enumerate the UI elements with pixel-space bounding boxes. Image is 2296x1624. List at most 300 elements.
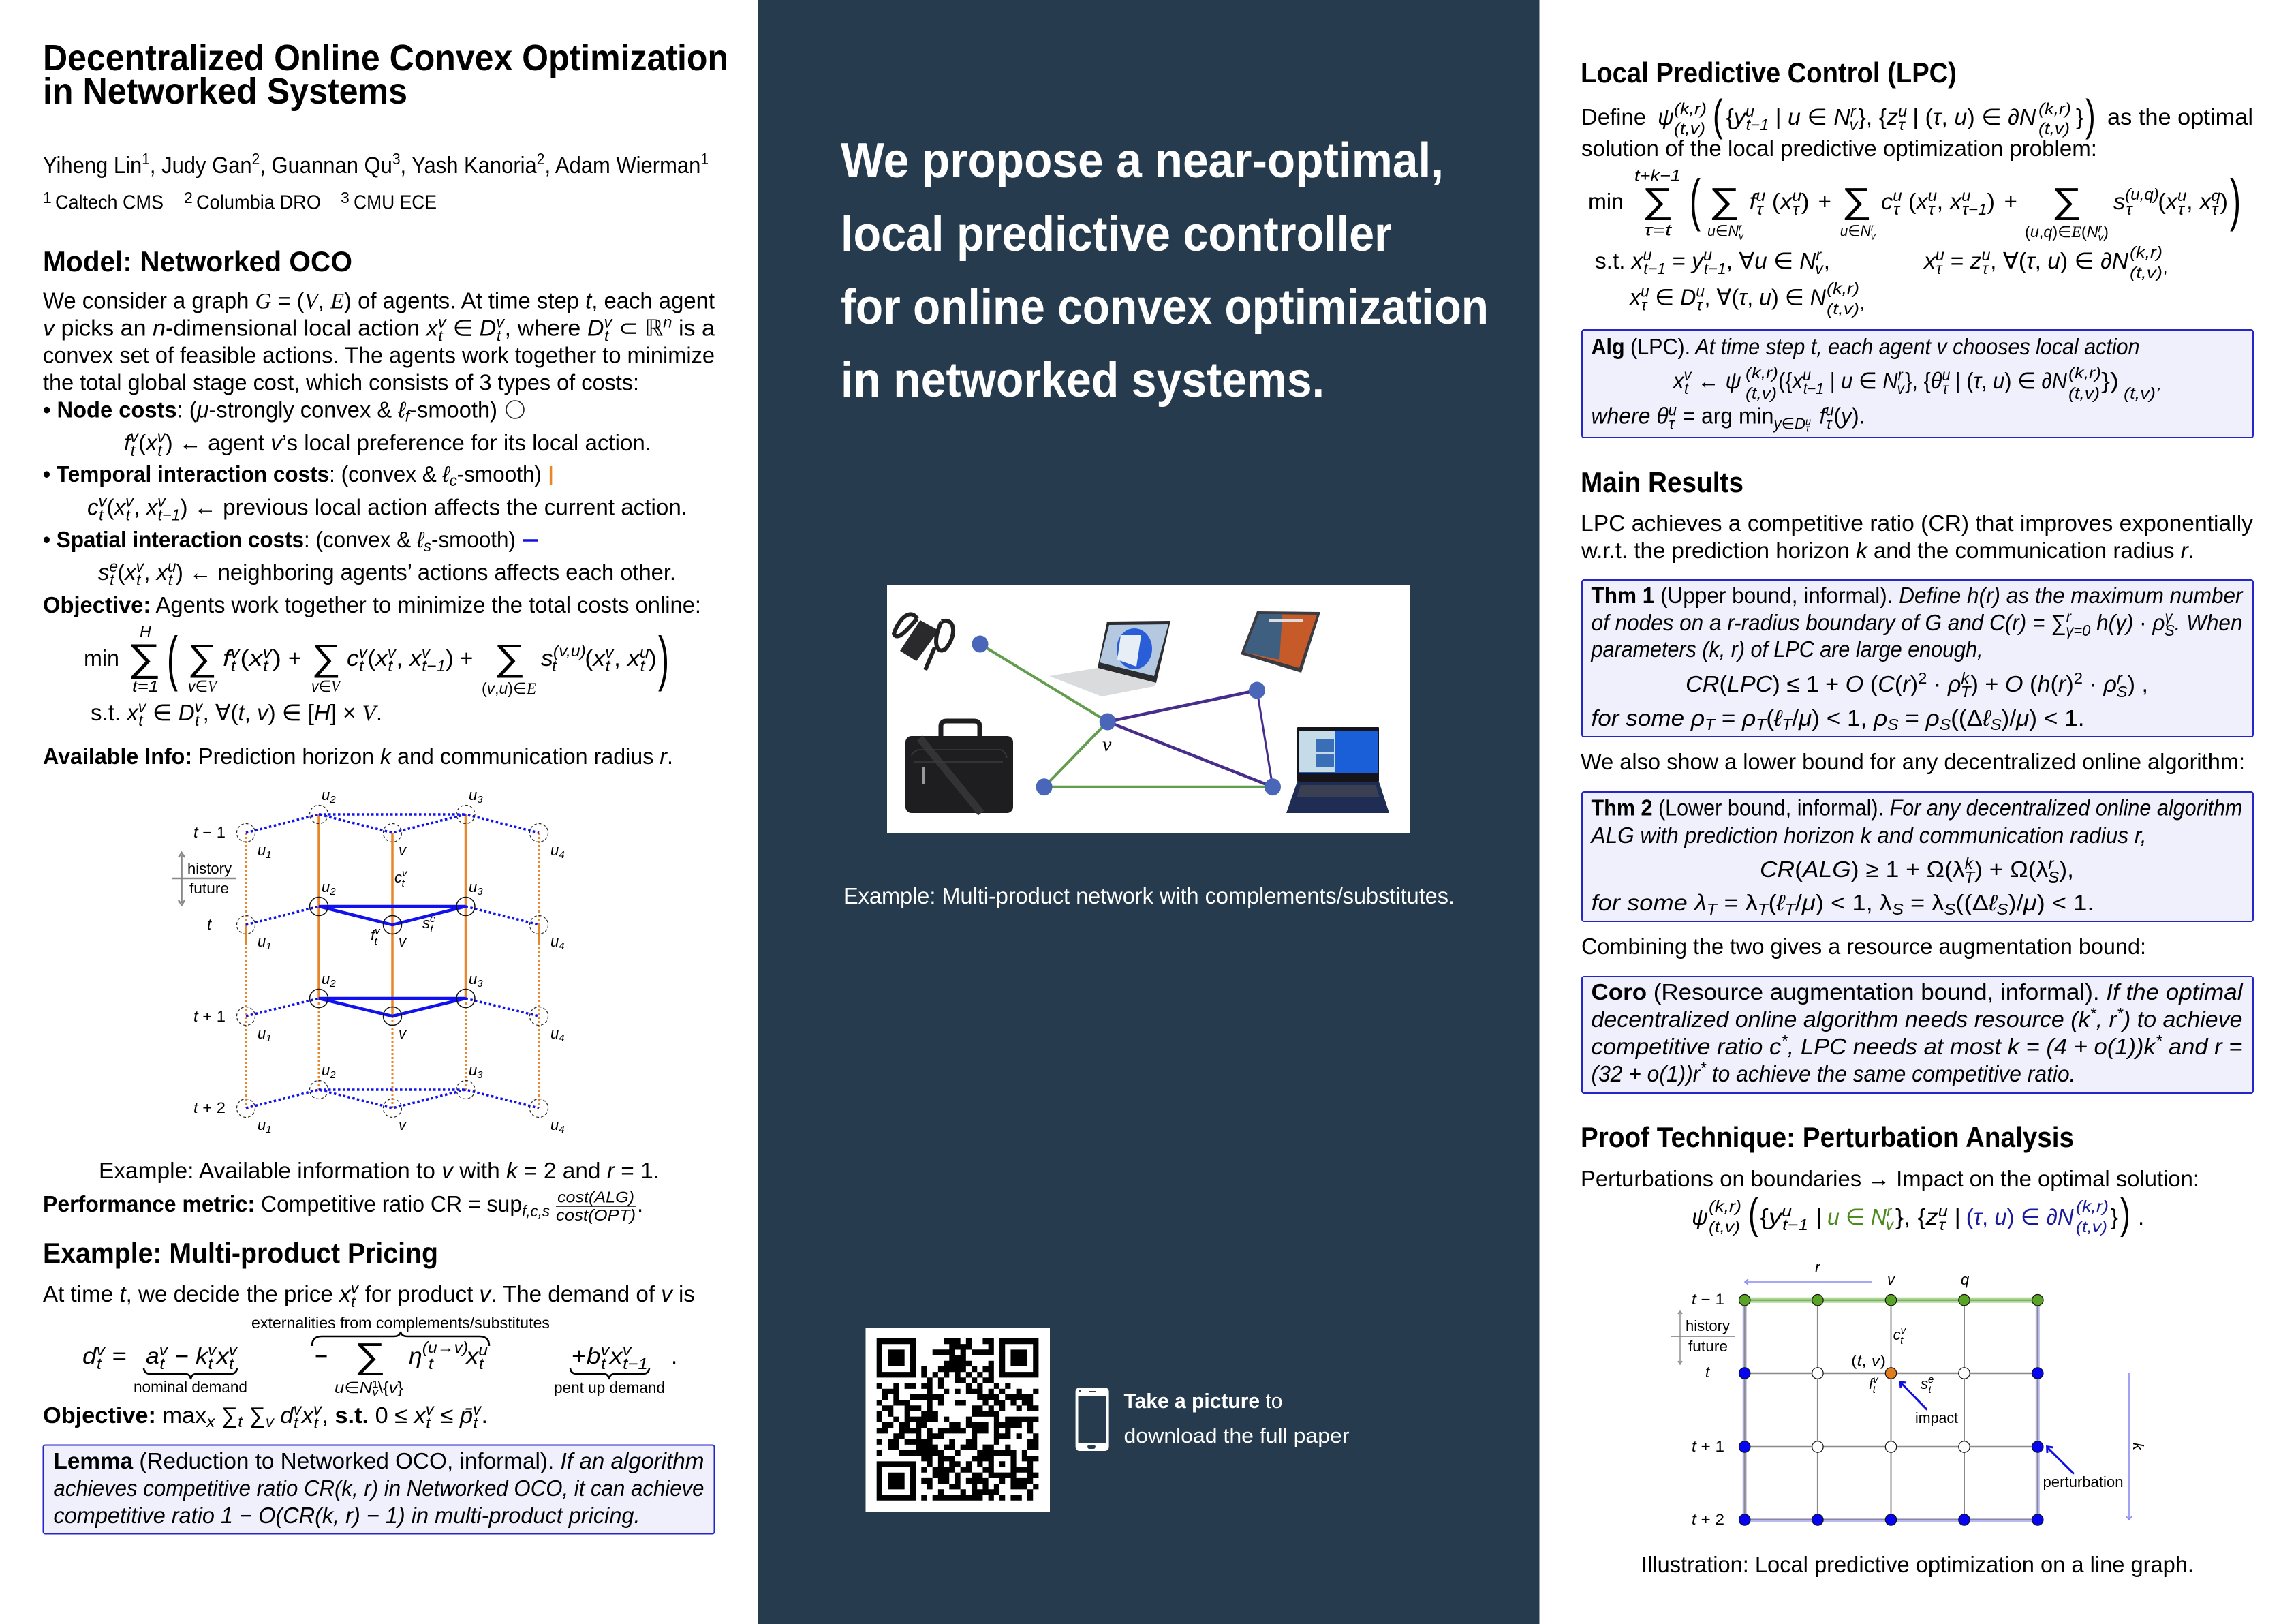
text block: pricing objective: d: [274, 1403, 294, 1428]
text block: model description: D: [480, 315, 496, 341]
callout: theorem 2: T: [1784, 900, 1797, 918]
callout: algorithm LPC: [1582, 330, 2253, 438]
callout: lemma: [44, 1445, 714, 1533]
equation: global objective: x: [408, 645, 422, 671]
text block: available info: Available Info: Prediction horizon k and communication radius r.: [43, 744, 673, 769]
bullet: node costs: • Node costs: (μ-strongly convex & ℓ: [43, 397, 405, 423]
bullet: spatial costs: x: [155, 560, 168, 585]
equation: constraints: (t,v): [2130, 264, 2162, 281]
callout: corollary: *: [1700, 1059, 1707, 1077]
callout: theorem 1: Thm 1 (Upper bound, informal). Define h(r) as the maximum number: [1592, 583, 2244, 608]
equation: local optimization problem: r: [2098, 223, 2103, 234]
QR code: [865, 1328, 1050, 1512]
callout: corollary: and r =: [2162, 1034, 2243, 1059]
equation: constraints: x: [1628, 285, 1642, 309]
equation: demand: v: [208, 1341, 217, 1359]
caption: line graph: Illustration: Local predictive optimization on a line graph.: [1641, 1552, 2194, 1577]
text block: model description: , where: [505, 315, 587, 341]
text block: LPC definition: (k,r): [2038, 99, 2071, 117]
callout: theorem 1: S: [1887, 716, 1899, 733]
callout: theorem 1: =: [1899, 705, 1926, 731]
chart: line graph perturbation: t + 2: [1692, 1511, 1724, 1528]
text block: performance metric: f,c,s: [522, 1202, 550, 1220]
bullet: temporal costs: v: [125, 492, 134, 510]
chart: available information graph: history: [187, 860, 232, 877]
callout: theorem 1: 2: [1918, 669, 1927, 687]
callout: download the paper: Take a picture to: [1124, 1389, 1282, 1413]
bullet: spatial costs: [43, 527, 676, 589]
equation: constraints: =: [1666, 248, 1692, 273]
affiliations: CMU ECE: [354, 192, 437, 214]
text block: model description: v: [604, 313, 613, 331]
text block: LPC definition: Define: [1581, 104, 1646, 129]
callout: algorithm LPC: t−1: [1803, 380, 1824, 397]
text block: performance metric: cost(ALG): [557, 1189, 634, 1206]
text block: pricing objective: .: [481, 1403, 488, 1428]
chart: line graph perturbation: c: [1893, 1326, 1901, 1343]
equation: perturbation: .: [2138, 1204, 2144, 1229]
text block: pricing objective: t: [474, 1414, 479, 1432]
text block: model description: v: [438, 313, 447, 331]
chart: available information graph: 1: [266, 1032, 272, 1044]
equation: local optimization problem: [1588, 167, 2241, 243]
equation: perturbation: }, {z: [1895, 1204, 1937, 1229]
equation: global objective: x: [591, 645, 606, 671]
equation: perturbation: τ: [1939, 1216, 1946, 1234]
bullet: node costs: t: [157, 442, 163, 459]
callout: corollary: ) to achieve: [2120, 1007, 2243, 1032]
title: [43, 37, 728, 112]
equation: local optimization problem: τ: [1756, 200, 1764, 218]
equation: global objective: v∈V: [188, 677, 219, 695]
callout: theorem 1: ((Δ: [1951, 705, 1983, 731]
equation: constraints: (k,r): [1827, 279, 1859, 297]
text block: pricing objective: ∑: [243, 1403, 266, 1428]
text block: model description: n: [663, 313, 672, 331]
text block: model description: t: [438, 327, 444, 345]
equation: constraints: τ: [1982, 260, 1989, 277]
bullet: temporal costs: [43, 461, 687, 523]
chart: line graph perturbation: [1671, 1259, 2147, 1528]
text block: performance metric: Performance metric: Competitive ratio CR = sup: [43, 1191, 531, 1216]
icon: laptop bag: [905, 721, 1013, 813]
equation: local optimization problem: τ: [1793, 200, 1800, 218]
equation: local optimization problem: x: [1914, 189, 1929, 214]
callout: theorem 2: [1582, 792, 2253, 921]
callout: algorithm LPC: (t,v): [1746, 384, 1777, 402]
equation: demand: =: [105, 1343, 127, 1368]
bullet: spatial costs: v: [136, 557, 145, 575]
text block: pricing objective: v: [313, 1400, 323, 1418]
text block: pricing objective: ≤: [434, 1403, 460, 1428]
callout: theorem 1: O (h(r): [2005, 671, 2073, 696]
equation: perturbation: (t,v): [1709, 1218, 1740, 1236]
equation: local optimization problem: u: [1928, 187, 1937, 204]
equation: global objective: v: [422, 643, 431, 661]
equation: demand: (u→v): [422, 1338, 468, 1356]
text block: pricing objective: p̄: [459, 1403, 473, 1428]
equation: demand: t: [229, 1355, 235, 1373]
equation: constraints: u: [1643, 246, 1652, 264]
callout: corollary: *: [1781, 1032, 1788, 1050]
callout: lemma: achieves competitive ratio CR(k, r) in Networked OCO, it can achieve: [53, 1475, 704, 1501]
heading: model: Model: Networked OCO: [43, 245, 352, 277]
chart: available information graph: 3: [477, 794, 483, 806]
callout: theorem 1: · ρ: [2140, 610, 2165, 635]
equation: local optimization problem: (u,q): [2125, 185, 2159, 203]
equation: demand: u∈N: [335, 1379, 371, 1396]
callout: theorem 1: r: [2117, 669, 2123, 687]
equation: demand: v: [623, 1341, 632, 1359]
chart: available information graph: 2: [329, 1069, 336, 1081]
callout: theorem 2: T: [1758, 900, 1770, 918]
equation: global objective: ): [446, 645, 454, 671]
callout: algorithm LPC: (t,v)’: [2124, 384, 2160, 402]
affiliations: Columbia DRO: [196, 192, 321, 214]
text block: pricing objective: ,: [322, 1403, 335, 1428]
equation: global objective: s.t. x: [91, 700, 138, 725]
equation: local optimization problem: τ: [2212, 200, 2219, 218]
authors: , Yash Kanoria: [401, 153, 537, 179]
callout: theorem 1: /: [1792, 705, 1799, 731]
bullet: temporal costs: x: [145, 495, 159, 519]
equation: constraints: τ: [1936, 260, 1943, 277]
equation: constraints: t−1: [1704, 260, 1726, 277]
equation: constraints: , ∀(: [1990, 248, 2026, 273]
chart: line graph perturbation: future: [1688, 1338, 1728, 1355]
text block: pricing objective: x: [206, 1413, 216, 1430]
callout: theorem 1: S: [1940, 716, 1951, 733]
callout: algorithm LPC: f: [1814, 403, 1828, 428]
affiliations: 2: [184, 189, 193, 206]
callout: corollary: , r: [2096, 1007, 2118, 1032]
bullet: node costs: v: [157, 428, 166, 446]
equation: demand: η: [409, 1343, 422, 1368]
text block: pricing intro: t: [351, 1293, 356, 1311]
figure: product network: [887, 585, 1410, 833]
callout: theorem 1: h(γ): [2090, 610, 2133, 635]
equation: constraints: ,: [1824, 248, 1830, 273]
text block: LPC definition: (: [1713, 91, 1723, 140]
callout: algorithm LPC: }): [2101, 368, 2119, 393]
equation: local optimization problem: f: [1750, 189, 1759, 214]
callout: algorithm LPC: τ: [1805, 423, 1810, 435]
callout: theorem 1: for some ρ: [1592, 705, 1705, 731]
equation: perturbation: ): [2120, 1191, 2130, 1238]
bullet: node costs: f: [405, 408, 412, 425]
chart: available information graph: u: [469, 970, 477, 987]
chart: line graph perturbation: perturbation: [2043, 1473, 2123, 1490]
equation: global objective: t: [195, 711, 200, 729]
equation: local optimization problem: x: [1778, 189, 1793, 214]
bullet: spatial costs: -smooth): [431, 527, 516, 552]
equation: local optimization problem: (: [1902, 189, 1916, 214]
callout: algorithm LPC: u ∈ N: [1841, 368, 1899, 393]
bullet: spatial costs: s: [424, 537, 431, 555]
equation: global objective: v: [138, 698, 147, 716]
bullet: spatial costs: s: [98, 560, 109, 585]
text block: pricing objective: v: [293, 1400, 302, 1418]
equation: local optimization problem: τ: [1893, 200, 1901, 218]
text block: results intro: w.r.t. the prediction horizon k and the communication radius r.: [1581, 538, 2194, 563]
bullet: spatial costs: • Spatial interaction costs: (convex & ℓ: [43, 527, 424, 552]
chart: line graph perturbation: q: [1961, 1271, 1970, 1288]
equation: demand: t: [159, 1355, 166, 1373]
equation: constraints: τ: [1696, 296, 1703, 313]
callout: theorem 1: . When: [2175, 610, 2243, 635]
chart: available information graph: c: [394, 869, 402, 886]
heading: example: Example: Multi-product Pricing: [43, 1237, 438, 1269]
callout: theorem 1: (: [1766, 705, 1774, 731]
chart: available information graph: 4: [559, 940, 565, 952]
equation: global objective: t: [138, 711, 144, 729]
equation: global objective: u: [640, 643, 649, 661]
chart: line graph perturbation: t: [1705, 1364, 1710, 1381]
equation: global objective: (v,u)∈E: [482, 679, 536, 697]
callout: corollary: *: [2090, 1005, 2097, 1022]
chart: line graph perturbation: v: [1901, 1325, 1907, 1336]
chart: available information graph: 1: [266, 940, 272, 952]
chart: line graph perturbation: history: [1686, 1317, 1730, 1334]
equation: constraints: t−1: [1643, 260, 1666, 277]
equation: global objective: ∑: [311, 637, 341, 678]
equation: local optimization problem: x: [2198, 189, 2212, 214]
callout: algorithm LPC: u: [1803, 366, 1811, 384]
equation: constraints: ∈: [1649, 285, 1680, 309]
text block: pricing objective: x: [300, 1403, 315, 1428]
callout: theorem 2: for some λ: [1592, 890, 1707, 915]
chart: available information graph: t − 1: [193, 824, 226, 841]
graph edges and nodes: [972, 635, 1281, 795]
chart: available information graph: u: [550, 842, 559, 859]
equation: local optimization problem: (: [1690, 168, 1701, 232]
callout: theorem 2: r: [2048, 855, 2055, 872]
chart: available information graph: u: [469, 1062, 477, 1079]
text block: lower bound intro: We also show a lower bound for any decentralized online algorithm:: [1581, 749, 2245, 774]
text block: LPC definition: u: [1898, 102, 1907, 120]
equation: global objective: v: [262, 643, 273, 661]
bullet: node costs: (: [138, 430, 146, 455]
callout: corollary: (32 + o(1))r: [1592, 1061, 1704, 1086]
equation: perturbation: (t,v): [2076, 1218, 2107, 1236]
chart: available information graph: u: [258, 842, 266, 859]
equation: local optimization problem: τ: [2178, 200, 2185, 218]
chart: available information graph: e: [430, 913, 435, 925]
caption: product network: Example: Multi-product network with complements/substitutes.: [843, 883, 1455, 908]
equation: perturbation: |: [1808, 1204, 1822, 1229]
text block: LPC definition: u: [1746, 102, 1754, 120]
callout: theorem 1: S: [1990, 716, 2002, 733]
equation: global objective: c: [347, 645, 359, 671]
callout: theorem 1: [1582, 580, 2253, 737]
equation: local optimization problem: ∑: [2051, 181, 2082, 221]
text block: model description: D: [587, 315, 604, 341]
callout: algorithm LPC: θ: [1931, 368, 1942, 393]
bullet: temporal costs: v: [99, 492, 108, 510]
callout: theorem 2: T: [1964, 868, 1976, 886]
equation: local optimization problem: (: [1765, 189, 1780, 214]
text block: combining intro: Combining the two gives a resource augmentation bound:: [1581, 934, 2146, 959]
equation: demand: t: [208, 1355, 214, 1373]
headline: for online convex optimization: [841, 280, 1489, 335]
chart: available information graph: 3: [477, 978, 483, 990]
chart: line graph perturbation: f: [1869, 1375, 1873, 1392]
text block: model description: [43, 288, 715, 395]
equation: constraints: (k,r): [2130, 243, 2162, 261]
equation: local optimization problem: t+k−1: [1634, 167, 1681, 185]
callout: algorithm LPC: Alg (LPC). At time step t, each agent v chooses local action: [1592, 334, 2139, 359]
callout: theorem 1: γ: [2165, 608, 2173, 626]
text block: performance metric: .: [637, 1191, 643, 1216]
callout: algorithm LPC: ←: [1692, 368, 1725, 393]
bullet: temporal costs: c: [450, 472, 457, 489]
text block: pricing objective: Objective: max: [43, 1403, 204, 1428]
bullet: node costs: [43, 397, 651, 459]
callout: lemma: Lemma (Reduction to Networked OCO, informal). If an algorithm: [53, 1448, 704, 1473]
callout: algorithm LPC: y).: [1841, 403, 1865, 428]
equation: global objective: v: [195, 698, 204, 716]
bullet: spatial costs: u: [168, 557, 176, 575]
callout: algorithm LPC: t: [1684, 380, 1690, 397]
chart: available information graph: v: [402, 868, 408, 879]
equation: demand: t: [429, 1355, 435, 1373]
chart: available information graph: v: [399, 842, 407, 859]
callout: corollary: *: [2117, 1005, 2124, 1022]
affiliations: 3: [341, 189, 350, 206]
bullet: spatial costs: ) ← neighboring agents’ actions affects each other.: [176, 560, 676, 585]
panel: left column: [43, 37, 728, 1533]
chart: available information graph: v: [399, 1116, 407, 1133]
equation: constraints: (t,v): [1827, 300, 1859, 318]
equation: local optimization problem: (u,q)∈E(N: [2025, 223, 2098, 241]
callout: theorem 1: 2: [2074, 669, 2083, 687]
equation: perturbation: u: [1938, 1202, 1948, 1220]
equation: local optimization problem: τ: [1929, 200, 1936, 218]
chart: line graph perturbation: (t, v): [1851, 1352, 1886, 1369]
callout: theorem 1: )/: [2002, 705, 2017, 731]
text block: results intro: LPC achieves a competitive ratio (CR) that improves exponentially: [1581, 510, 2253, 536]
text block: LPC definition: (t,v): [2038, 119, 2070, 137]
chart: available information graph: 4: [559, 1124, 565, 1135]
equation: global objective: D: [179, 700, 195, 725]
text block: model description: t: [604, 327, 610, 345]
chart: available information graph: s: [422, 915, 430, 932]
equation: local optimization problem: u: [1792, 187, 1801, 204]
callout: theorem 1: γ=0: [2066, 622, 2091, 639]
callout: algorithm LPC: v: [1684, 366, 1692, 384]
chart: line graph perturbation: s: [1921, 1375, 1928, 1392]
chart: available information graph: v: [399, 1025, 407, 1042]
text block: LPC definition: }: [2076, 104, 2083, 129]
text block: results intro: [1581, 510, 2253, 563]
callout: theorem 1: S: [2117, 683, 2128, 701]
chart: available information graph: t + 1: [193, 1008, 226, 1025]
bullet: node costs: x: [144, 430, 158, 455]
chart: available information graph: 2: [329, 978, 336, 990]
equation: perturbation: t−1: [1782, 1216, 1808, 1234]
equation: demand: t: [601, 1355, 607, 1373]
text block: model description: v: [496, 313, 506, 331]
callout: theorem 2: k: [1965, 855, 1974, 872]
icon: blue laptop: [1286, 727, 1389, 813]
text block: pricing objective: ∑: [215, 1403, 238, 1428]
equation: global objective: x: [374, 645, 388, 671]
text block: LPC definition: (k,r): [1674, 99, 1707, 117]
equation: local optimization problem: u: [2177, 187, 2187, 204]
text block: LPC definition: τ, u) ∈ ∂N: [1933, 104, 2036, 129]
bullet: node costs: v: [130, 428, 139, 446]
callout: theorem 2: Thm 2 (Lower bound, informal). For any decentralized online algorithm: [1592, 795, 2243, 821]
chart: available information graph: v: [375, 925, 381, 937]
headline: in networked systems.: [841, 353, 1324, 408]
callout: corollary: decentralized online algorithm needs resource (k: [1592, 1007, 2076, 1032]
equation: global objective: t: [359, 657, 365, 675]
text block: LPC definition: }, {: [1858, 104, 1887, 129]
equation: local optimization problem: ∑: [1642, 181, 1673, 221]
chart: available information graph: 3: [477, 886, 483, 898]
text block: performance metric: [43, 1189, 643, 1224]
equation: global objective: x: [247, 645, 264, 671]
bullet: node costs: t: [131, 442, 136, 459]
callout: theorem 1: ) ,: [2128, 671, 2148, 696]
chart: available information graph: t + 2: [193, 1099, 226, 1116]
text block: LPC definition: ψ: [1658, 104, 1674, 129]
equation: constraints: =: [1944, 248, 1970, 273]
callout: algorithm LPC: u: [1805, 416, 1812, 428]
text block: LPC definition: (t,v): [1674, 119, 1705, 137]
callout: theorem 1: T: [1961, 683, 1972, 701]
chart: available information graph: future: [189, 880, 229, 897]
equation: global objective: t, v) ∈ [H] × V.: [238, 700, 382, 726]
icon: silver laptop: [1049, 621, 1170, 696]
chart: line graph perturbation: v: [1887, 1271, 1896, 1288]
equation: demand: −: [168, 1343, 196, 1368]
bullet: temporal costs: t−1: [158, 506, 180, 523]
callout: algorithm LPC: = arg min: [1677, 403, 1773, 428]
equation: local optimization problem: u: [1756, 187, 1765, 204]
chart: available information graph: u: [322, 878, 330, 895]
equation: local optimization problem: τ=t: [1644, 221, 1673, 239]
equation: global objective: t: [606, 657, 611, 675]
callout: theorem 1: T: [1756, 716, 1767, 733]
callout: algorithm LPC: y∈D: [1773, 414, 1805, 432]
bullet: spatial costs: t: [136, 571, 142, 589]
chart: available information graph: u: [322, 1062, 330, 1079]
caption: available information: Example: Available information to v with k = 2 and r = 1.: [99, 1158, 660, 1183]
text block: pricing intro: v. The demand of v is: [480, 1281, 695, 1306]
equation: local optimization problem: u: [1961, 187, 1971, 204]
equation: global objective: (: [367, 645, 375, 671]
text block: pricing objective: v: [426, 1400, 435, 1418]
callout: algorithm LPC: |: [1824, 368, 1841, 393]
callout: corollary: , LPC needs at most k = (4 + o(1))k: [1788, 1034, 2156, 1059]
equation: perturbation: ψ: [1692, 1204, 1708, 1229]
graph edges and nodes: v: [1102, 733, 1112, 756]
title: in Networked Systems: [43, 71, 407, 112]
text block: pricing objective: v: [473, 1400, 482, 1418]
equation: constraints: , ∀: [1726, 248, 1755, 273]
callout: theorem 1: ) +: [1971, 671, 2005, 696]
callout: algorithm LPC: }, {: [1905, 368, 1931, 393]
bullet: node costs: ) ← agent: [166, 430, 270, 455]
text block: pricing intro: v: [351, 1279, 360, 1297]
bullet: temporal costs: (: [107, 495, 114, 519]
headline: We propose a near-optimal,: [841, 134, 1444, 188]
text block: pricing intro: for product: [359, 1281, 480, 1306]
equation: constraints: u: [1696, 282, 1705, 300]
equation: constraints: D: [1680, 285, 1696, 309]
equation: demand: pent up demand: [554, 1379, 665, 1396]
